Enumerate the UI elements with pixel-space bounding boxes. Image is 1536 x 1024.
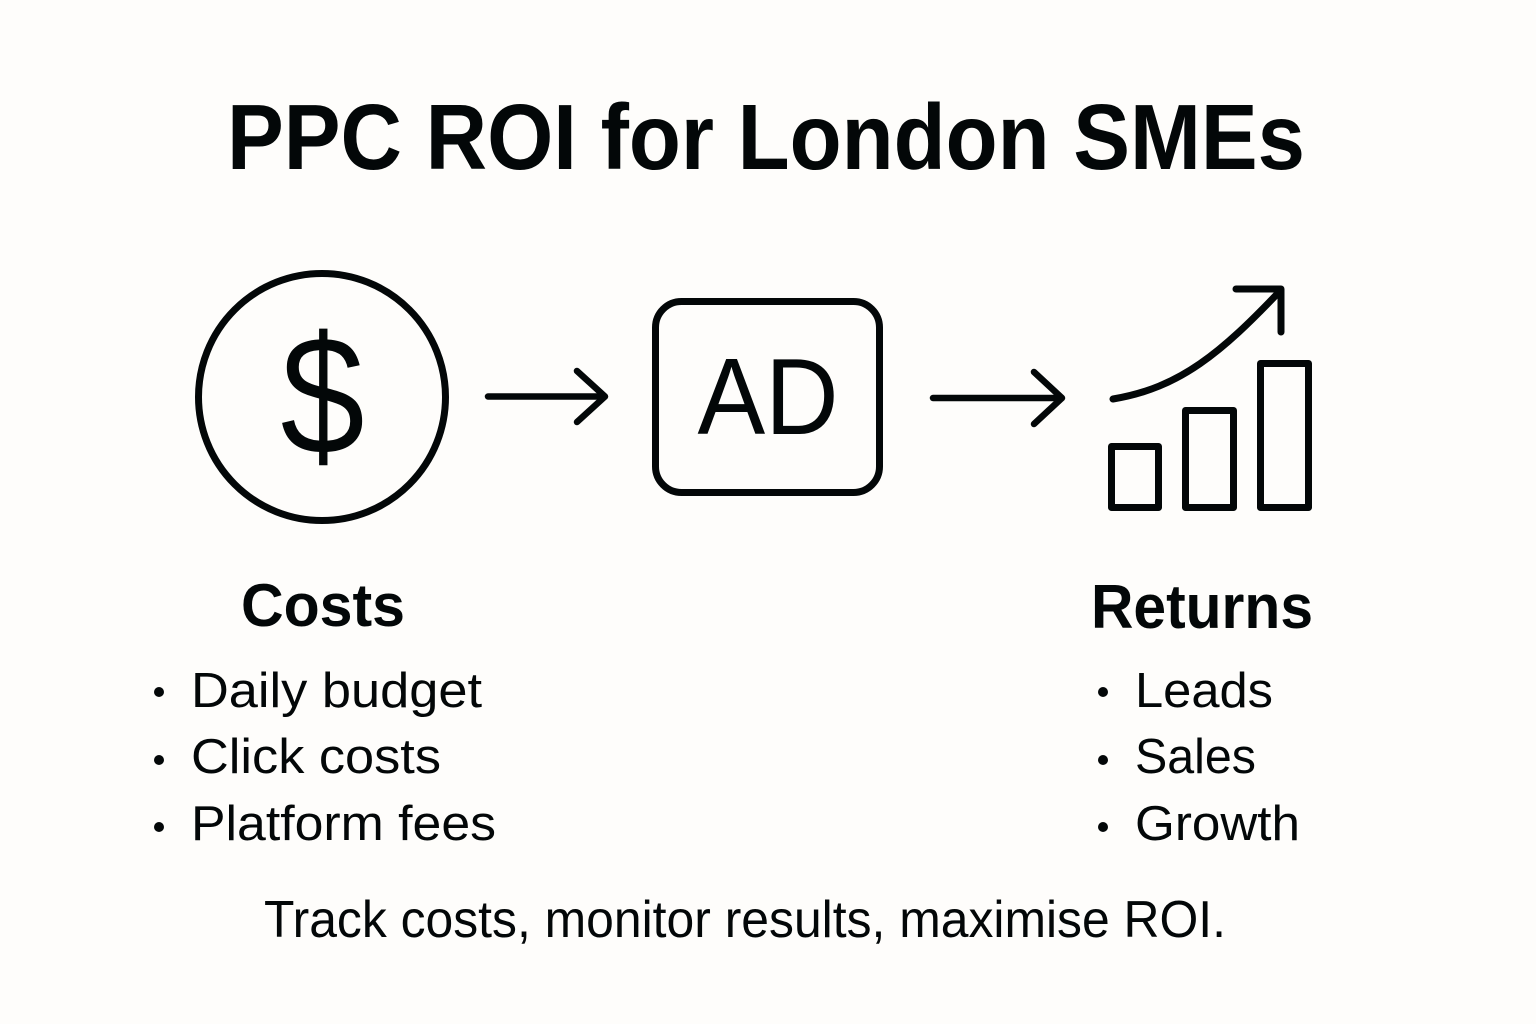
list: returns: Growth — [1135, 797, 1300, 851]
list: costs: Daily budget — [191, 664, 482, 718]
list: costs — [154, 664, 496, 851]
list: returns: Sales — [1135, 730, 1256, 784]
list: returns — [1098, 664, 1300, 851]
icon: dollar coin: $ — [280, 302, 365, 491]
list: returns: Leads — [1135, 664, 1273, 718]
icon: dollar coin — [198, 274, 446, 520]
icon: rising bar chart — [1112, 289, 1308, 508]
title: PPC ROI for London SMEs — [227, 85, 1305, 189]
heading: returns: Returns — [1091, 573, 1313, 642]
icon: ad box: AD — [698, 336, 838, 458]
heading: costs: Costs — [241, 572, 405, 639]
arrow: costs to ad — [488, 371, 605, 422]
arrow: ad to returns — [933, 372, 1062, 424]
list: costs: Platform fees — [191, 797, 496, 851]
list: costs: Click costs — [191, 730, 441, 784]
footer tagline: Track costs, monitor results, maximise ROI. — [264, 891, 1226, 949]
icon: ad box — [656, 302, 880, 492]
